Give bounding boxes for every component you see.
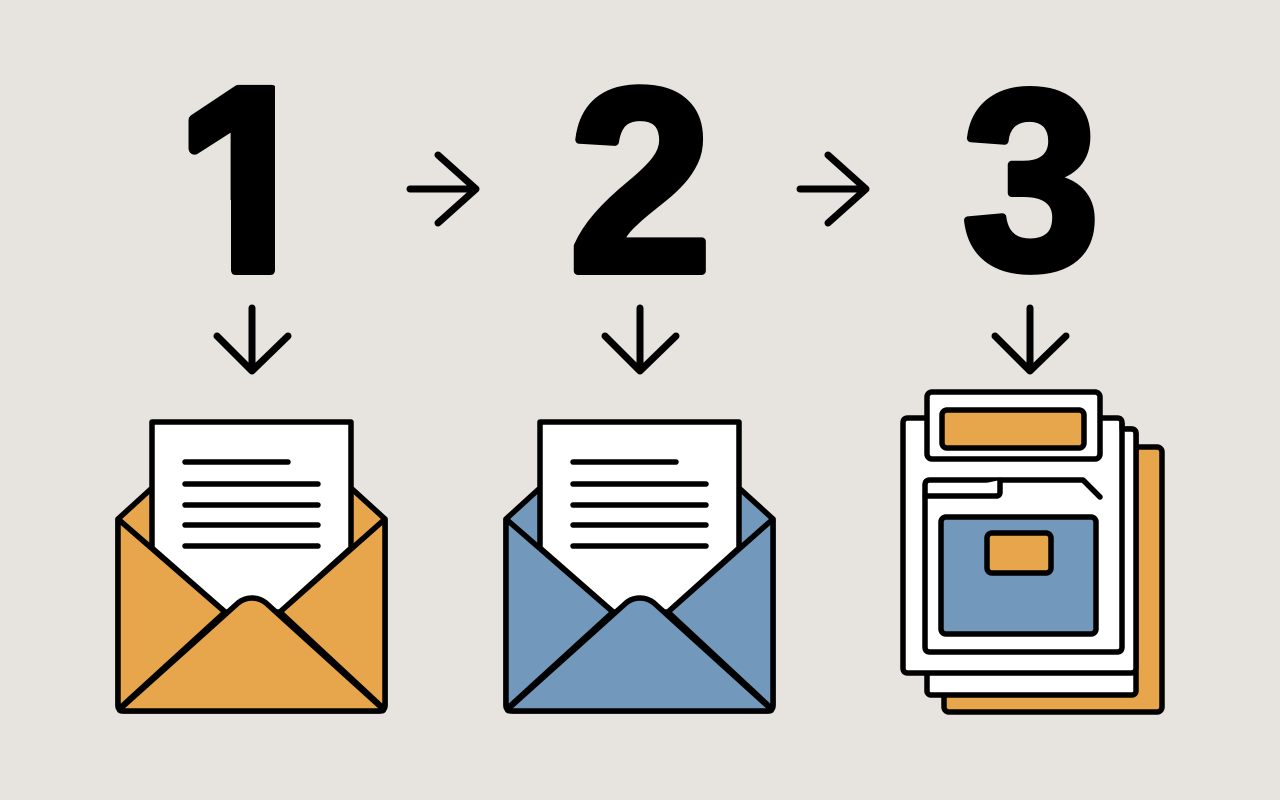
numeral 1: 1 [177,34,319,327]
icon: blue open envelope with letter [506,422,773,711]
arrow: step 1 to step 2 [410,155,476,223]
icon: stacked documents with folder [903,392,1162,712]
numeral 2: 2 [569,34,712,326]
icon: orange open envelope with letter [118,422,385,711]
arrow: down to documents [995,308,1066,371]
arrow: down to envelope 1 [217,308,288,371]
numeral 3: 3 [962,39,1100,323]
arrow: step 2 to step 3 [800,155,866,223]
arrow: down to envelope 2 [605,308,676,371]
